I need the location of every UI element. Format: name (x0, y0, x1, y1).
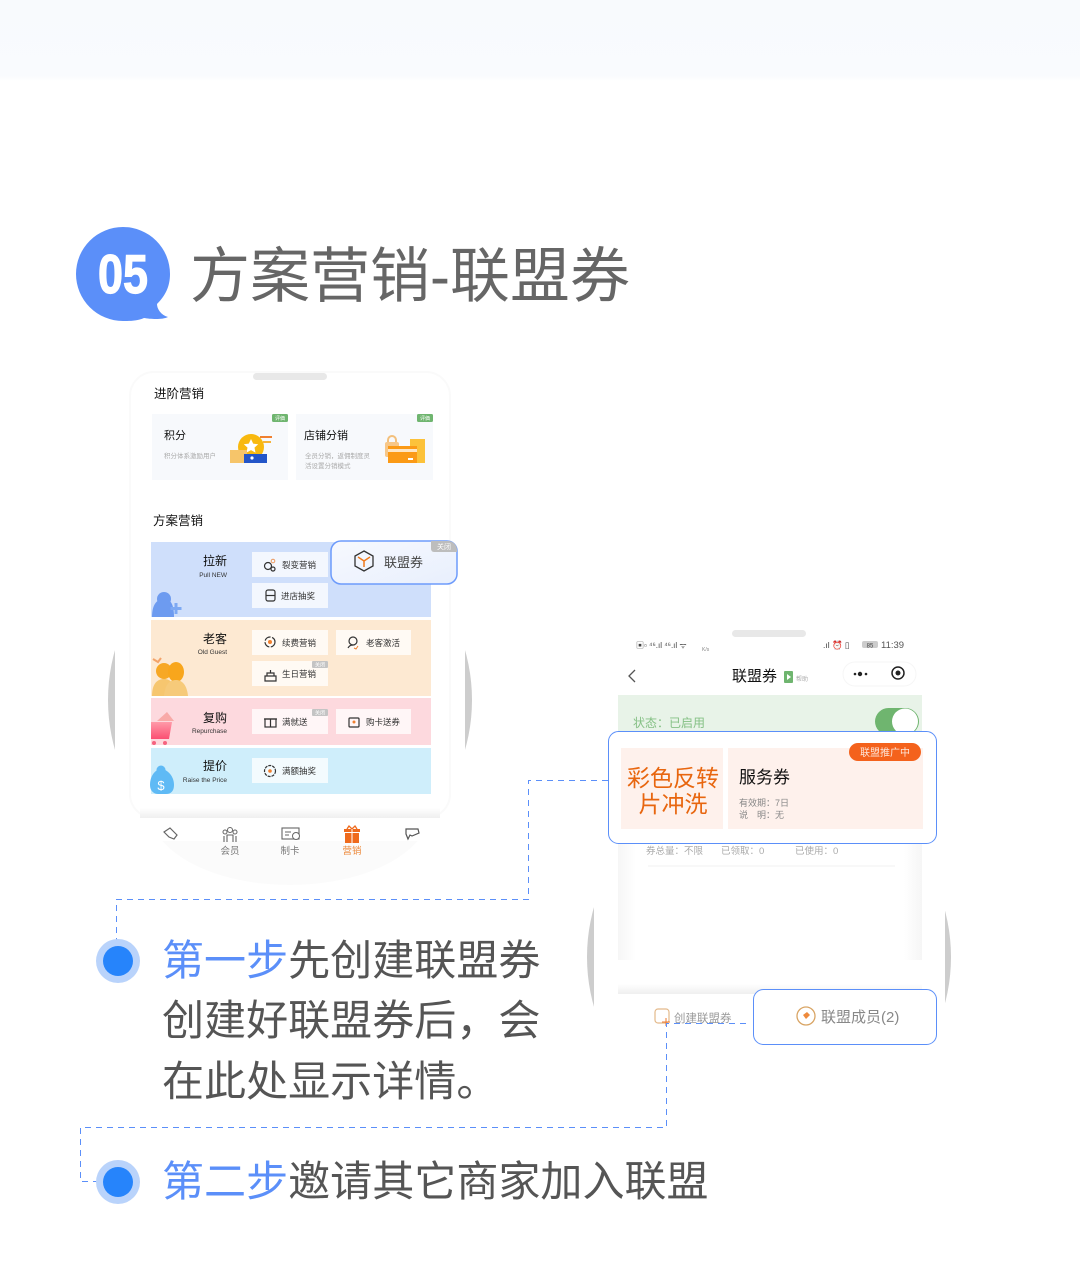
navigation bar: 帮助 (796, 675, 808, 683)
card: points (152, 414, 288, 480)
button: create coupon (655, 1009, 732, 1026)
button: create coupon: 创建联盟券 (674, 1011, 732, 1025)
status bar: .ıl ⏰ ▯ (823, 640, 850, 650)
row: existing customers: 老客 (203, 631, 227, 646)
bottom navigation: 制卡 (280, 845, 300, 857)
row: existing customers (151, 620, 431, 696)
step two (96, 1158, 709, 1205)
footer shadow (618, 984, 922, 994)
row: repurchase (151, 698, 431, 745)
bottom navigation: 营销 (342, 845, 362, 857)
highlight: coupon card: 片冲洗 (638, 791, 708, 817)
coupon statistics (646, 845, 895, 867)
navigation bar (629, 662, 916, 686)
icon: number speech bubble: 05 (98, 243, 148, 305)
highlight: coupon card: 彩色反转 (627, 765, 719, 791)
row: raise the price: $ (157, 778, 165, 793)
card: points: 评価 (275, 415, 285, 422)
card: store distribution: 活设置分销模式 (305, 461, 351, 470)
heading: advanced marketing: 进阶营销 (154, 387, 204, 401)
status bar: K/s (702, 647, 710, 653)
highlight: coupon card: 有效期：7日 (739, 797, 789, 808)
step one text: 第一步先创建联盟券 (162, 937, 540, 984)
row: repurchase: 满就送 (282, 717, 308, 727)
connector: step one dashed line (116, 780, 608, 940)
row: existing customers: Old Guest (198, 649, 227, 656)
status band (618, 695, 922, 735)
highlight: coupon card: 说 明：无 (739, 809, 784, 820)
step one (96, 937, 540, 984)
connector: step two dashed line (80, 1024, 746, 1182)
navigation bar: 联盟券 (732, 668, 777, 685)
coupon statistics: 券总量：不限 (646, 845, 704, 857)
row: existing customers: 续费营销 (282, 638, 317, 648)
status band: 状态：已启用 (633, 716, 705, 730)
row: new customers: Pull NEW (199, 572, 228, 579)
highlight: alliance members (754, 990, 936, 1044)
top banner band (0, 0, 1080, 81)
bottom navigation (164, 826, 419, 857)
section heading (76, 227, 630, 321)
step two text: 第二步邀请其它商家加入联盟 (162, 1158, 709, 1205)
coupon statistics: 已领取：0 (721, 845, 764, 857)
card: points: 积分 (164, 429, 186, 442)
row: repurchase: 关闭 (315, 710, 325, 716)
row: new customers: 拉新 (203, 553, 227, 568)
row: existing customers: 生日营销 (282, 669, 317, 679)
card: points: 积分体系激励用户 (164, 451, 216, 460)
row: raise the price: Raise the Price (183, 777, 227, 784)
bullet (96, 1160, 140, 1204)
status bar: ▣▫ ⁴⁶.ıl ⁴⁶.ıl ᯤ (636, 641, 687, 650)
heading: programme marketing: 方案营销 (153, 513, 203, 528)
highlight: coupon card: 联盟推广中 (860, 746, 910, 759)
status bar (636, 640, 904, 653)
callout: alliance coupon: 关闭 (437, 542, 451, 551)
card: store distribution (296, 414, 433, 480)
highlight: alliance members: 联盟成员(2) (821, 1009, 899, 1026)
step one description: 创建好联盟券后，会 (162, 997, 540, 1044)
phone mockup: coupon details (587, 600, 951, 1145)
card: store distribution: 全员分销，返佣制度灵 (305, 451, 370, 460)
row: new customers (151, 542, 431, 617)
row: repurchase: 复购 (203, 710, 227, 725)
phone speaker (732, 630, 806, 637)
step one description (162, 997, 540, 1105)
callout: alliance coupon (331, 541, 457, 584)
card: store distribution: 评価 (420, 415, 430, 422)
phone speaker (253, 373, 327, 380)
status bar: 11:39 (881, 640, 904, 651)
row: new customers: 进店抽奖 (281, 591, 316, 601)
row: repurchase: 购卡送券 (366, 717, 401, 727)
row: repurchase: Repurchase (192, 728, 227, 735)
row: raise the price (150, 748, 431, 794)
bullet (96, 939, 140, 983)
title: 方案营销-联盟券 (190, 243, 630, 310)
tab shadow (140, 808, 440, 818)
icon: number speech bubble (76, 227, 170, 321)
coupon statistics: 已使用：0 (795, 845, 838, 857)
step one description: 在此处显示详情。 (162, 1058, 498, 1105)
row: new customers: 裂变营销 (282, 560, 317, 570)
highlight: coupon card (608, 732, 936, 844)
row: existing customers: 关闭 (315, 662, 325, 668)
row: existing customers: 老客激活 (366, 638, 401, 648)
phone mockup: marketing menu (108, 345, 472, 890)
bottom navigation: 会员 (220, 845, 240, 857)
callout: alliance coupon: 联盟券 (384, 555, 423, 570)
highlight: coupon card: 服务券 (739, 768, 790, 787)
row: raise the price: 满额抽奖 (282, 766, 317, 776)
card: store distribution: 店铺分销 (304, 428, 348, 442)
row: raise the price: 提价 (203, 758, 227, 773)
status bar: 85 (867, 644, 874, 650)
